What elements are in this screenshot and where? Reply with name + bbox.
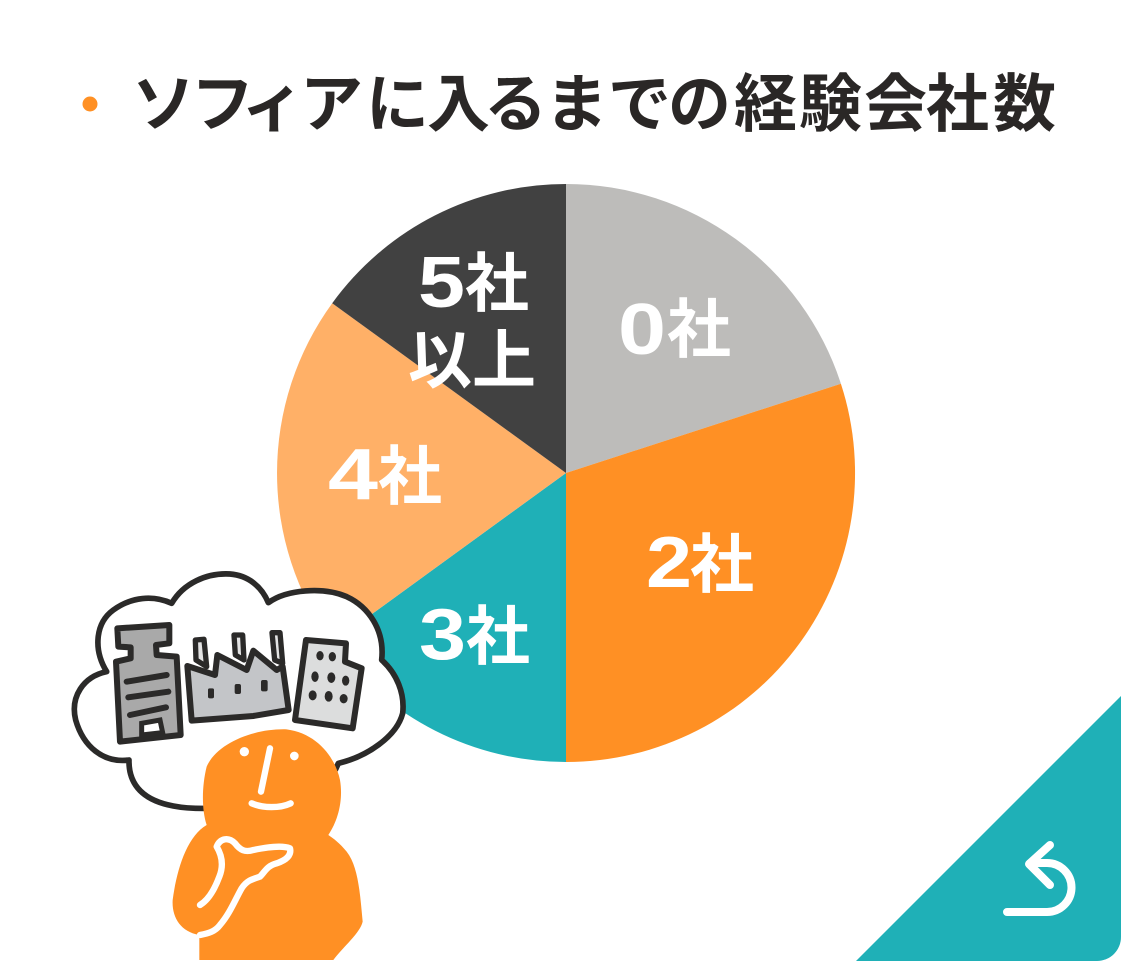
hand outline [200, 839, 290, 935]
illustration: person thinking about companies [74, 574, 403, 960]
label: 4社: 4 [328, 435, 378, 515]
slice: 5社以上 [332, 184, 566, 473]
icon: office building [116, 625, 181, 742]
label: 3社: 社 [466, 601, 530, 673]
label: 5社: 社 [465, 248, 529, 320]
label: 4社: 社 [378, 441, 442, 513]
mouth [252, 803, 291, 807]
label: 3社: 3 [419, 595, 466, 675]
back button [856, 696, 1121, 961]
nose [261, 748, 270, 792]
label: 4社 [328, 435, 442, 515]
label: 0社: 0 [618, 290, 666, 370]
label: 5社 [418, 243, 529, 323]
label: 0社: 社 [667, 294, 731, 366]
slice: 4社 [277, 303, 566, 643]
label: 3社 [419, 595, 530, 675]
teal corner triangle [856, 696, 1121, 961]
icon: tall building [295, 640, 362, 728]
icon: factory [187, 633, 289, 721]
label: 0社 [618, 290, 731, 370]
thought cloud [74, 574, 403, 808]
slice: 0社 [566, 184, 841, 473]
slice: 2社 [566, 384, 855, 762]
title text: ソフィアに入るまでの経験会社数 [132, 70, 1056, 140]
label: 2社 [646, 523, 754, 603]
person [173, 729, 363, 960]
title bullet [82, 96, 98, 112]
label: 2社: 社 [690, 529, 754, 601]
label: 以上: 以上 [408, 325, 536, 397]
slice: 3社 [332, 473, 566, 762]
title [82, 70, 1056, 140]
body [173, 729, 363, 960]
label: 5社: 5 [418, 243, 465, 323]
pie chart [277, 184, 855, 762]
eyes [240, 747, 249, 756]
label: 2社: 2 [646, 523, 692, 603]
icon: return arrow [1007, 845, 1072, 912]
